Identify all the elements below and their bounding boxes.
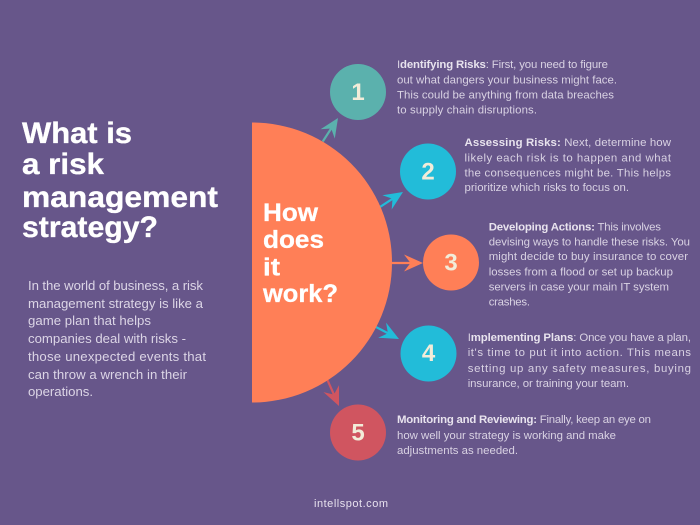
step 1 text: This could be anything from data breaches (397, 90, 614, 102)
intro text block (28, 278, 206, 399)
arrow: to step 4 (370, 319, 403, 347)
intro text block: management strategy is like a (28, 296, 204, 311)
arrow: to step 5 (319, 375, 347, 409)
arrow: to step 1 (316, 113, 345, 146)
arrow: to step 3 (390, 254, 423, 272)
step 5 text: how well your strategy is working and make (397, 430, 616, 442)
semicircle heading: How (263, 199, 319, 227)
step 3 text (489, 222, 690, 308)
step 4 text (468, 332, 691, 390)
intro text block: game plan that helps (28, 313, 151, 328)
step 1 text: Identifying Risks: First, you need to figure (397, 59, 608, 71)
semicircle heading: work? (262, 280, 338, 308)
title: a risk (22, 148, 104, 181)
step 1 (330, 59, 617, 120)
semicircle heading: it (263, 254, 281, 282)
step 1 text: out what dangers your business might face. (397, 74, 617, 86)
central semicircle (252, 122, 392, 402)
step 2 badge: 2 (421, 158, 435, 186)
step 1 text: to supply chain disruptions. (397, 104, 537, 116)
step 2 text: the consequences might be. This helps (464, 168, 671, 180)
step 1 text (397, 59, 617, 116)
step 4 badge: 4 (422, 340, 436, 367)
step 4 text: Implementing Plans: Once you have a plan, (468, 332, 691, 344)
step 2 text: prioritize which risks to focus on. (464, 182, 629, 194)
step 2 (400, 137, 672, 200)
step 4 text: it's time to put it into action. This means (468, 347, 691, 359)
step 3 text: crashes. (489, 296, 530, 308)
step 4 text: setting up any safety measures, buying (468, 363, 691, 375)
title: management (22, 181, 218, 214)
step 5 text (397, 414, 651, 457)
intro text block: those unexpected events that (28, 349, 206, 364)
step 1 badge: 1 (351, 79, 365, 106)
title (22, 117, 218, 244)
title: What is (22, 117, 132, 150)
step 3 text: devising ways to handle these risks. You (489, 236, 690, 248)
step 3 text: Developing Actions: This involves (489, 222, 661, 234)
step 2 text: Assessing Risks: Next, determine how (464, 137, 672, 149)
step 4 (400, 326, 691, 390)
step 2 badge (400, 144, 456, 200)
step 4 text: insurance, or training your team. (468, 378, 629, 390)
step 5 text: adjustments as needed. (397, 445, 518, 457)
semicircle heading (262, 199, 338, 308)
step 3 text: losses from a flood or set up backup (489, 266, 673, 278)
step 5 (330, 404, 651, 460)
step 4 badge (400, 326, 456, 382)
step 5 text: Monitoring and Reviewing: Finally, keep an eye on (397, 414, 651, 426)
step 5 badge: 5 (351, 420, 365, 446)
arrow: to step 2 (375, 185, 408, 214)
step 5 badge (330, 404, 386, 460)
title: strategy? (22, 211, 158, 244)
step 3 text: servers in case your main IT system (489, 282, 669, 294)
step 3 text: might decide to buy insurance to cover (489, 251, 688, 263)
footer source: intellspot.com (314, 498, 388, 510)
intro text block: companies deal with risks - (28, 331, 186, 346)
step 3 (423, 222, 690, 308)
step 3 badge (423, 234, 479, 290)
intro text block: can throw a wrench in their (28, 367, 188, 382)
step 2 text (464, 137, 672, 194)
step 1 badge (330, 64, 386, 120)
step 3 badge: 3 (444, 250, 458, 277)
semicircle heading: does (263, 226, 324, 254)
intro text block: operations. (28, 384, 93, 399)
intro text block: In the world of business, a risk (28, 278, 203, 293)
step 2 text: likely each risk is to happen and what (464, 152, 672, 164)
